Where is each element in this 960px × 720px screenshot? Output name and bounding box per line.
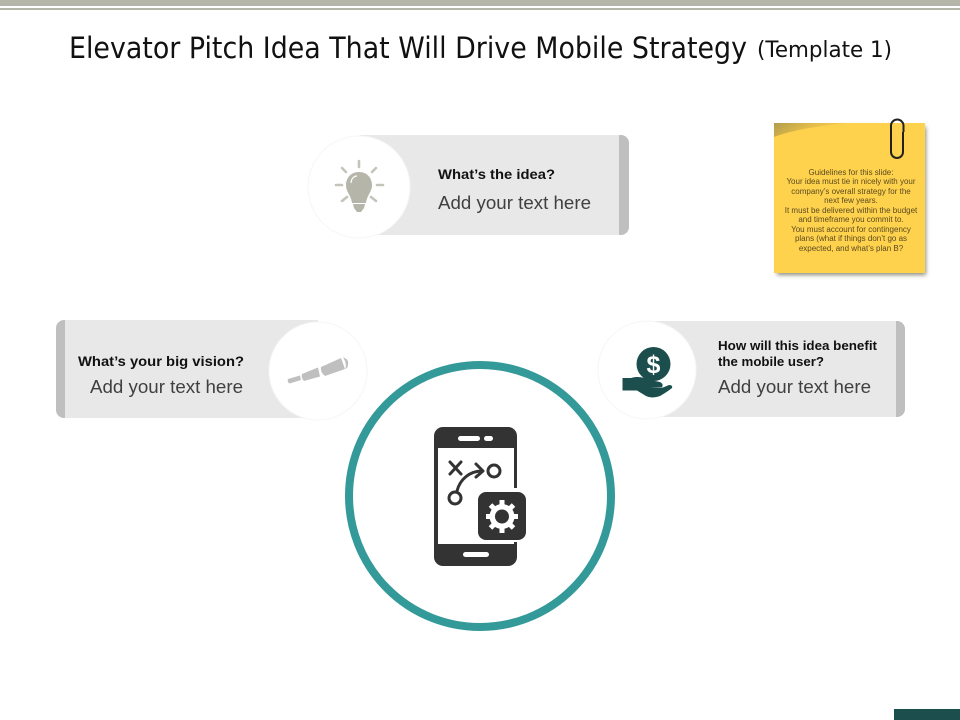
text: guidelines	[785, 168, 918, 253]
text: guidelines: company’s overall strategy for the	[791, 187, 911, 196]
central teal ring	[349, 365, 611, 627]
icon: mobile strategy phone	[434, 427, 528, 566]
text: benefit heading: the mobile user?	[718, 354, 824, 369]
panel: big vision	[56, 320, 367, 420]
panel: what's the idea	[308, 135, 629, 238]
icon: hand with dollar coin: $	[647, 351, 661, 379]
text: guidelines: You must account for contingency	[791, 225, 911, 234]
text: idea heading: What’s the idea?	[438, 166, 555, 182]
text: guidelines: plans (what if things don’t go as	[795, 234, 907, 243]
text: benefit body: Add your text here	[718, 377, 871, 397]
text: guidelines: expected, and what’s plan B?	[799, 244, 904, 253]
text: guidelines: and timeframe you commit to.	[798, 215, 904, 224]
text: benefit heading	[718, 338, 878, 369]
text: benefit heading: How will this idea benefit	[718, 338, 878, 353]
text: guidelines: Your idea must tie in nicely with your	[786, 177, 916, 186]
text: guidelines: It must be delivered within the budget	[785, 206, 918, 215]
text: guidelines: next few years.	[824, 196, 878, 205]
icon: light bulb	[336, 161, 383, 212]
icon: telescope	[288, 358, 348, 384]
title: (Template 1)	[757, 38, 892, 63]
title: Elevator Pitch Idea That Will Drive Mobile Strategy	[69, 31, 747, 65]
text: vision heading: What’s your big vision?	[78, 353, 244, 369]
footer corner block	[894, 709, 960, 720]
text: guidelines: Guidelines for this slide:	[809, 168, 893, 177]
text: vision body: Add your text here	[90, 377, 243, 397]
icon: hand with dollar coin	[622, 347, 672, 398]
icon: paperclip	[891, 119, 904, 158]
panel: user benefit	[598, 321, 905, 419]
text: idea body: Add your text here	[438, 193, 591, 213]
sticky note	[774, 119, 926, 275]
top header bars	[0, 0, 960, 10]
